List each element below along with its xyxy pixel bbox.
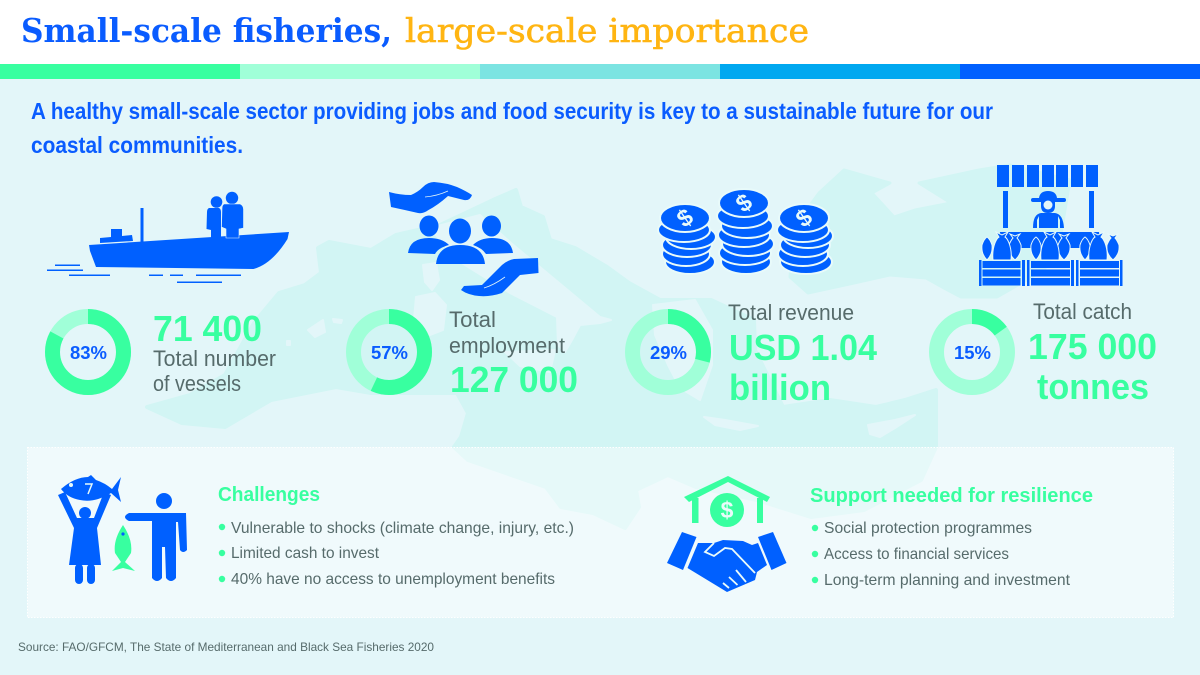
stat: employment: [354, 307, 578, 400]
stat: vessels: Total number: [153, 346, 276, 371]
stat: employment: Total: [449, 307, 496, 332]
stat: catch: [936, 299, 1157, 407]
icon: house and coin: [684, 476, 770, 527]
stat: revenue: [632, 300, 877, 408]
donut 83%: [52, 316, 124, 388]
icon: handshake: [667, 532, 786, 592]
stat: revenue: USD 1.04: [729, 327, 877, 368]
subtitle: A healthy small-scale sector providing jobs and food security is key to a sustainable future for our: [31, 98, 993, 124]
icon: fishing boat: [47, 192, 289, 283]
stat: catch: Total catch: [1033, 299, 1132, 324]
bottom panel: [28, 448, 1174, 618]
support text: Access to financial services: [824, 546, 1009, 563]
donut 15%: [936, 316, 1008, 388]
icon: coin stacks: $: [672, 203, 699, 233]
donut 57%: 57%: [371, 342, 408, 363]
stat: catch: tonnes: [1037, 366, 1149, 407]
icon: coin stacks: $: [731, 188, 758, 218]
stat: catch: 175 000: [1028, 326, 1157, 367]
stat: revenue: billion: [729, 367, 831, 408]
support text: [810, 485, 1093, 589]
source: Source: FAO/GFCM, The State of Mediterranean and Black Sea Fisheries 2020: [18, 640, 434, 654]
title: Small-scale fisheries,: [21, 11, 392, 50]
background map of the Mediterranean and Black Sea: [147, 165, 1070, 528]
support text: Support needed for resilience: [810, 485, 1093, 507]
donut 15%: 15%: [954, 342, 991, 363]
stat: revenue: Total revenue: [728, 300, 854, 325]
donut 29%: [632, 316, 704, 388]
subtitle: [31, 98, 993, 158]
subtitle: coastal communities.: [31, 132, 243, 158]
donut 83%: 83%: [70, 342, 107, 363]
icon: coin stacks: $: [791, 203, 818, 233]
icon: green fish: [112, 525, 135, 571]
icon: hands protecting people: [389, 182, 538, 296]
colour bands: [0, 64, 1200, 79]
challenges text: Challenges: [218, 484, 320, 506]
challenges text: Vulnerable to shocks (climate change, injury, etc.): [231, 520, 574, 537]
challenges text: [218, 484, 574, 588]
stat: vessels: of vessels: [153, 371, 241, 396]
donut 29%: 29%: [650, 342, 687, 363]
stat: vessels: [52, 308, 276, 396]
header band: [0, 0, 1200, 64]
stat: vessels: 71 400: [153, 308, 262, 349]
donut 57%: [354, 316, 424, 388]
challenges text: Limited cash to invest: [231, 545, 380, 562]
icon: fish market stall: [979, 165, 1122, 286]
title: large-scale importance: [405, 11, 809, 50]
stat: employment: 127 000: [450, 359, 578, 400]
icon: house and coin: $: [721, 497, 734, 523]
support text: Social protection programmes: [824, 520, 1032, 537]
icon: people with fish: [58, 475, 187, 584]
icon: coin stacks: [658, 188, 833, 274]
stat: employment: employment: [449, 333, 565, 358]
challenges text: 40% have no access to unemployment benefits: [231, 571, 555, 588]
support text: Long-term planning and investment: [824, 572, 1071, 589]
